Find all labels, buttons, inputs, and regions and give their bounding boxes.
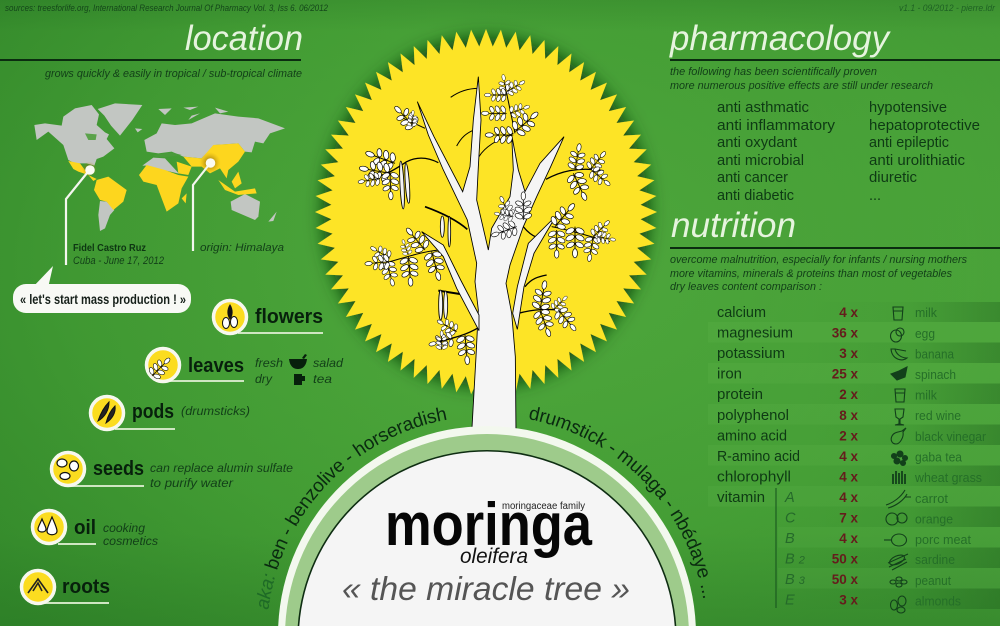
- nutrient names: magnesium: [717, 326, 793, 342]
- effects list column 1: anti microbial: [717, 153, 804, 169]
- multipliers: 4 x: [839, 531, 858, 546]
- multipliers: 2 x: [839, 428, 858, 444]
- title: moringa: moringa: [385, 491, 593, 558]
- aka names left: aka: ben - benzolive - horseradish: [257, 408, 446, 610]
- effects list column 1: anti oxydant: [717, 135, 797, 151]
- nutrient names: amino acid: [717, 428, 787, 444]
- slogan: « the miracle tree »: [342, 570, 630, 607]
- part: leaves: dry: [255, 372, 273, 386]
- multipliers: 3 x: [839, 592, 858, 608]
- table stripes: [708, 302, 1000, 609]
- food names: banana: [915, 346, 955, 362]
- panel: pharmacology: [669, 19, 1000, 204]
- nutrition intro: dry leaves content comparison :: [670, 281, 822, 293]
- heading: location: location: [185, 19, 303, 58]
- sources note: sources: treesforlife.org, International Research Journal Of Pharmacy Vol. 3, Iss 6. 06/2012: [5, 3, 328, 13]
- nutrient names: vitamin: [717, 490, 765, 506]
- multipliers: 4 x: [839, 305, 858, 320]
- multipliers: 3 x: [839, 346, 858, 361]
- part: leaves: fresh: [255, 356, 283, 370]
- part: oil: cooking: [103, 521, 145, 535]
- multipliers: 50 x: [832, 552, 858, 566]
- pointer: Himalaya: [193, 158, 215, 251]
- effects list column 2: hepatoprotective: [869, 118, 980, 134]
- food names: black vinegar: [915, 429, 987, 444]
- effects list column 1: [717, 100, 836, 204]
- food names: peanut: [915, 573, 951, 588]
- title badge: [278, 426, 696, 626]
- part: flowers: flowers: [255, 306, 323, 328]
- nutrient names: calcium: [717, 305, 766, 321]
- nutrient names: R-amino acid: [717, 449, 800, 465]
- panel: nutrition: [670, 206, 1000, 613]
- multipliers: 50 x: [832, 572, 858, 587]
- effects list column 1: anti asthmatic: [717, 100, 809, 116]
- label: origin: origin: Himalaya: [200, 242, 284, 254]
- food names: [914, 305, 987, 608]
- pharmacology intro: more numerous positive effects are still under research: [670, 80, 933, 92]
- aka names right: drumstick - mulaga - nbédaye ...: [530, 407, 708, 598]
- pointer: Cuba: [66, 165, 95, 265]
- food names: wheat grass: [914, 470, 982, 485]
- pharmacology intro: [670, 66, 933, 92]
- version note: v1.1 - 09/2012 - pierre.ldr: [899, 3, 996, 13]
- panel: tree sun: [282, 0, 690, 430]
- part: flowers: [214, 300, 323, 334]
- part: roots: roots: [62, 576, 110, 598]
- vitamin letters: A: [784, 490, 795, 506]
- location description: grows quickly & easily in tropical / sub-tropical climate: [45, 68, 302, 80]
- thin branches: [373, 88, 610, 342]
- icon: tea cup: [294, 374, 305, 385]
- multipliers: 25 x: [832, 367, 858, 382]
- multipliers: 2 x: [839, 387, 858, 402]
- leaf clusters: [357, 73, 617, 365]
- nutrient names: iron: [717, 367, 742, 383]
- multipliers: 4 x: [839, 470, 858, 484]
- world map: [34, 103, 285, 231]
- part: pods: (drumsticks): [181, 404, 250, 418]
- food names: milk: [915, 388, 937, 402]
- multipliers: 8 x: [839, 408, 858, 423]
- vitamin letters: E: [785, 592, 795, 608]
- nutrient names: [717, 305, 800, 506]
- food names: egg: [915, 326, 935, 341]
- part: leaves: tea: [313, 372, 332, 386]
- nutrient names: chlorophyll: [717, 470, 791, 486]
- label: Cuba date: Cuba - June 17, 2012: [73, 255, 164, 267]
- tree illustration: [357, 73, 617, 433]
- multipliers: 4 x: [839, 490, 858, 505]
- effects list column 2: [869, 100, 980, 204]
- part: oil: cosmetics: [103, 534, 158, 548]
- vitamin letters: [776, 488, 806, 608]
- heading: nutrition: nutrition: [671, 206, 796, 245]
- part: roots: [22, 570, 110, 604]
- vitamin letters: B: [785, 531, 795, 547]
- part: seeds: seeds: [93, 458, 144, 480]
- effects list column 2: diuretic: [869, 170, 917, 186]
- part: oil: oil: [74, 517, 96, 539]
- multipliers: [832, 305, 858, 608]
- vitamin letters: B 2: [785, 552, 805, 568]
- nutrition intro: [670, 254, 967, 293]
- pods: [399, 161, 451, 320]
- effects list column 1: anti diabetic: [717, 188, 794, 204]
- food names: sardine: [915, 552, 955, 567]
- part: oil: [32, 510, 158, 548]
- part: pods: pods: [132, 401, 174, 423]
- effects list column 2: anti urolithiatic: [869, 153, 965, 169]
- effects list column 2: ...: [869, 188, 881, 204]
- lower left branch: [422, 232, 479, 331]
- food names: orange: [915, 512, 953, 526]
- multipliers: 36 x: [832, 326, 858, 340]
- food names: milk: [915, 305, 937, 320]
- panel: plant uses: [22, 300, 343, 604]
- part: seeds: [52, 452, 293, 490]
- speech bubble: « let's start mass production ! »: [20, 292, 186, 307]
- trunk: [417, 77, 564, 433]
- effects list column 1: anti cancer: [717, 170, 788, 186]
- effects list column 2: hypotensive: [869, 100, 947, 116]
- part: leaves: leaves: [188, 355, 244, 377]
- nutrient names: protein: [717, 387, 763, 403]
- nutrition intro: overcome malnutrition, especially for infants / nursing mothers: [670, 254, 967, 266]
- family label: moringaceae family: [502, 501, 585, 512]
- icon: salad bowl: [289, 354, 307, 369]
- pharmacology intro: the following has been scientifically proven: [670, 66, 877, 78]
- part: seeds: to purify water: [150, 476, 234, 490]
- part: leaves: [146, 348, 343, 386]
- label: Fidel Castro: Fidel Castro Ruz: [73, 242, 146, 254]
- part: leaves: salad: [313, 356, 343, 370]
- part: seeds: can replace alumin sulfate: [150, 461, 293, 475]
- nutrition intro: more vitamins, minerals & proteins than most of vegetables: [670, 268, 952, 280]
- food icons: [884, 307, 911, 613]
- effects list column 1: anti inflammatory: [717, 118, 836, 134]
- vitamin letters: C: [785, 510, 796, 526]
- panel: location: [0, 19, 303, 313]
- nutrient names: potassium: [717, 346, 785, 362]
- effects list column 2: anti epileptic: [869, 135, 949, 151]
- speech bubble: [13, 266, 191, 313]
- food names: almonds: [915, 594, 961, 608]
- food names: carrot: [915, 491, 948, 506]
- multipliers: 7 x: [839, 510, 858, 526]
- multipliers: 4 x: [839, 449, 858, 464]
- lower right branch: [513, 216, 556, 329]
- nutrient names: polyphenol: [717, 408, 789, 424]
- food names: porc meat: [915, 532, 971, 547]
- food names: gaba tea: [915, 450, 963, 464]
- species name: oleifera: [460, 545, 528, 568]
- part: pods: [90, 396, 250, 430]
- food names: red wine: [915, 408, 961, 423]
- food names: spinach: [915, 367, 956, 382]
- heading: pharmacology: pharmacology: [669, 19, 891, 58]
- vitamin letters: B 3: [785, 572, 806, 588]
